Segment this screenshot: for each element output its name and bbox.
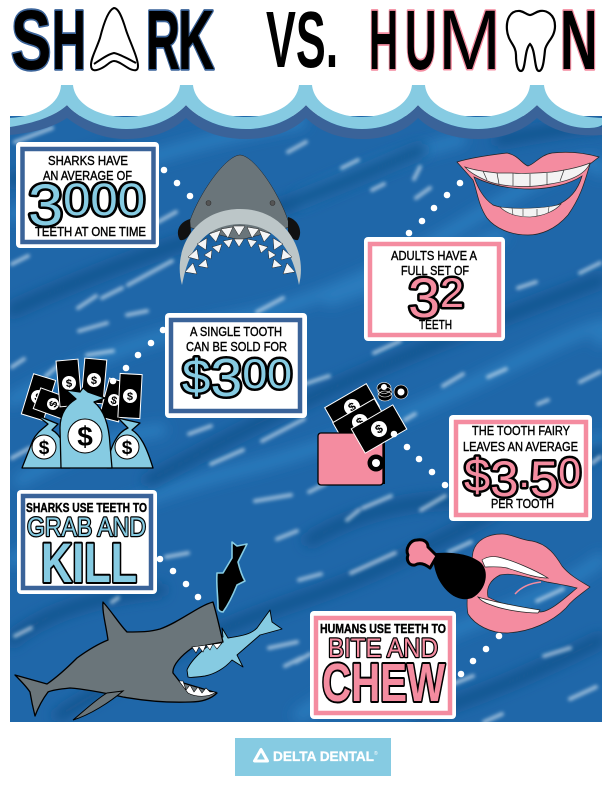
wallet clasp: [368, 454, 384, 472]
text: an average of: AN AVERAGE OF: [43, 168, 132, 183]
bills: $: [109, 394, 118, 408]
text: the tooth fairy: THE TOOTH FAIRY: [472, 423, 570, 438]
text: bite and: BITE AND: [328, 633, 438, 663]
text: kill: KILL: [41, 531, 137, 594]
shark lower teeth: [179, 681, 216, 696]
bills: $: [66, 378, 73, 390]
number: 3000: 000: [63, 174, 145, 225]
left bag: $: [39, 438, 50, 459]
bills: [21, 358, 142, 422]
shark upper teeth: [192, 643, 222, 653]
number: $3.50: $: [464, 449, 490, 501]
logo text: DELTA DENTAL: [273, 749, 374, 764]
icon: delta triangle: [254, 750, 268, 761]
number: $300: 3: [210, 348, 242, 408]
shark body: [15, 602, 223, 716]
bills: $: [47, 399, 61, 409]
icon: human tooth: [507, 11, 555, 71]
lips: [457, 152, 599, 235]
panel: 32 human teeth: [364, 237, 505, 341]
bubbles: shark teeth: [161, 167, 193, 199]
number: $3.50: .: [519, 452, 530, 496]
bubbles: bite and chew: [458, 633, 502, 677]
tongue: [515, 582, 541, 594]
bills: $: [90, 375, 97, 387]
cash: [325, 384, 387, 445]
bill front: $: [373, 421, 386, 437]
icon: drumstick: [407, 540, 486, 599]
bills: $: [127, 391, 133, 403]
icon: smiling mouth: [457, 152, 599, 235]
dark wave band: [10, 105, 602, 139]
text: chew: CHEW: [322, 653, 445, 713]
lips: [467, 534, 590, 633]
coins: [377, 382, 408, 401]
drumstick meat: [434, 553, 486, 599]
blue fish: [187, 610, 282, 677]
bubbles: tooth price: [110, 327, 166, 384]
icon: shark head: [178, 155, 301, 285]
shark eyes: [206, 201, 275, 206]
shark jaw: [180, 209, 301, 285]
shark teeth: [185, 226, 295, 274]
text: teeth: TEETH: [419, 317, 452, 332]
lower teeth: [500, 204, 561, 217]
text: sharks use teeth to: SHARKS USE TEETH TO: [26, 500, 147, 515]
number: 32: 2: [440, 269, 464, 316]
panel: bite and chew: [310, 611, 456, 719]
icon: attacking shark and fish: [15, 542, 282, 720]
text: adults have a: ADULTS HAVE A: [391, 248, 477, 263]
bubbles: grab and kill: [157, 556, 201, 600]
number: 32: 3: [408, 266, 440, 329]
light wave band: [10, 85, 602, 129]
cash: $: [354, 414, 367, 430]
icon: biting mouth: [467, 534, 590, 633]
drumstick bone: [407, 540, 437, 568]
right bag: $: [122, 438, 133, 459]
registered mark: ®: [374, 750, 378, 757]
panel: 3000 shark teeth: [16, 142, 159, 248]
shark pectoral fin: [73, 691, 123, 720]
bubbles: human teeth: [406, 180, 463, 236]
text: grab and: GRAB AND: [27, 512, 146, 542]
panel: tooth sold for 300: [165, 313, 307, 418]
text: sharks have: SHARKS HAVE: [48, 153, 128, 168]
wallet body: [318, 433, 383, 485]
text: can be sold for: CAN BE SOLD FOR: [186, 339, 287, 354]
center bag: $: [77, 421, 93, 452]
number: $300: 00: [242, 350, 292, 397]
heading: human: [369, 0, 598, 88]
panel: tooth fairy 3.50: [449, 415, 592, 521]
shark fins: [178, 217, 300, 240]
lower teeth: [478, 597, 540, 613]
text: humans use teeth to: HUMANS USE TEETH TO: [320, 621, 446, 636]
upper teeth: [482, 557, 548, 578]
number: $3.50: 3: [490, 451, 519, 507]
bubbles: tooth fairy: [391, 431, 448, 488]
ocean background: [10, 116, 609, 722]
title: [11, 0, 598, 88]
text: leaves an average: LEAVES AN AVERAGE: [463, 439, 578, 454]
wallet back: [320, 434, 385, 484]
text: full set of: FULL SET OF: [401, 263, 469, 278]
text: a single tooth: A SINGLE TOOTH: [190, 324, 282, 339]
text: per tooth: PER TOOTH: [491, 496, 554, 511]
text: teeth at one time: TEETH AT ONE TIME: [35, 224, 146, 239]
upper teeth: [465, 163, 590, 187]
icon: money bags: [21, 358, 153, 468]
number: 3000: 3: [28, 173, 63, 238]
bills: $: [33, 391, 42, 405]
waves: [10, 85, 602, 139]
icon: shark tooth: [91, 8, 138, 70]
icon: wallet with cash: [318, 382, 408, 485]
cash: $: [346, 399, 359, 415]
number: $3.50: 0: [558, 451, 581, 495]
number: $3.50: 5: [530, 451, 558, 507]
heading: shark: [11, 0, 214, 88]
logo: delta dental: [235, 738, 391, 776]
black fish: [217, 542, 247, 612]
number: $300: $: [182, 351, 210, 404]
panel: grab and kill: [17, 490, 157, 594]
